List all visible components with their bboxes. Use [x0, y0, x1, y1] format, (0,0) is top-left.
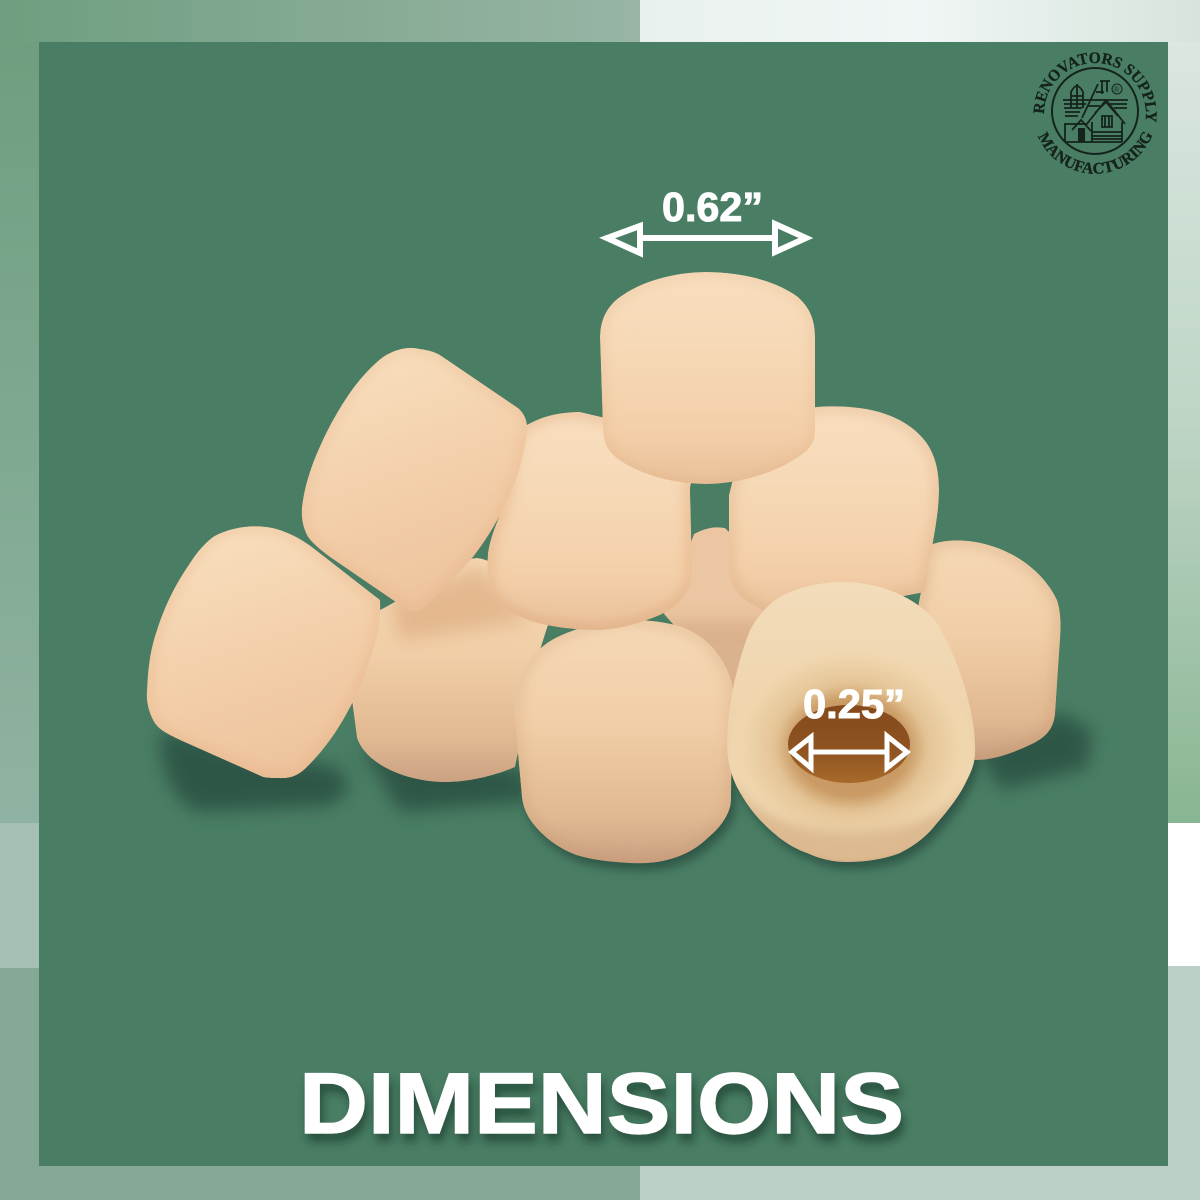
peg: top of pile: [600, 272, 815, 484]
hole: [788, 705, 910, 783]
logo: Renovators Supply Manufacturing seal: [1033, 52, 1157, 174]
peg: middle center standing: [487, 412, 700, 630]
logo: Renovators Supply Manufacturing seal: RENOVATORS SUPPLY: [1033, 52, 1157, 122]
peg: lower left behind: [352, 558, 548, 782]
dimension: 0.62 inch outer width: [607, 184, 806, 253]
peg: front center: [514, 620, 733, 863]
label: 0.62: 0.62”: [662, 184, 763, 230]
label: 0.25: 0.25”: [803, 681, 905, 727]
arrow: outer width: [607, 224, 806, 253]
peg: upper left tilted: [302, 348, 527, 612]
cast shadows under the pile: [160, 589, 1092, 870]
peg: far left tilted: [147, 526, 380, 778]
peg: front right with hole: [727, 582, 975, 870]
logo: Renovators Supply Manufacturing seal: MANUFACTURING: [1038, 131, 1152, 174]
product photo: pile of ten rubber pegs: [147, 272, 1092, 870]
title: DIMENSIONS: [299, 1056, 904, 1152]
peg: far right: [918, 540, 1060, 760]
peg: hidden back center: [664, 527, 764, 690]
logo: Renovators Supply Manufacturing seal: ®: [1114, 85, 1120, 94]
dimension: 0.25 inch hole: [792, 681, 907, 768]
peg: back right standing: [729, 406, 939, 620]
arrow: hole width: [792, 736, 907, 768]
